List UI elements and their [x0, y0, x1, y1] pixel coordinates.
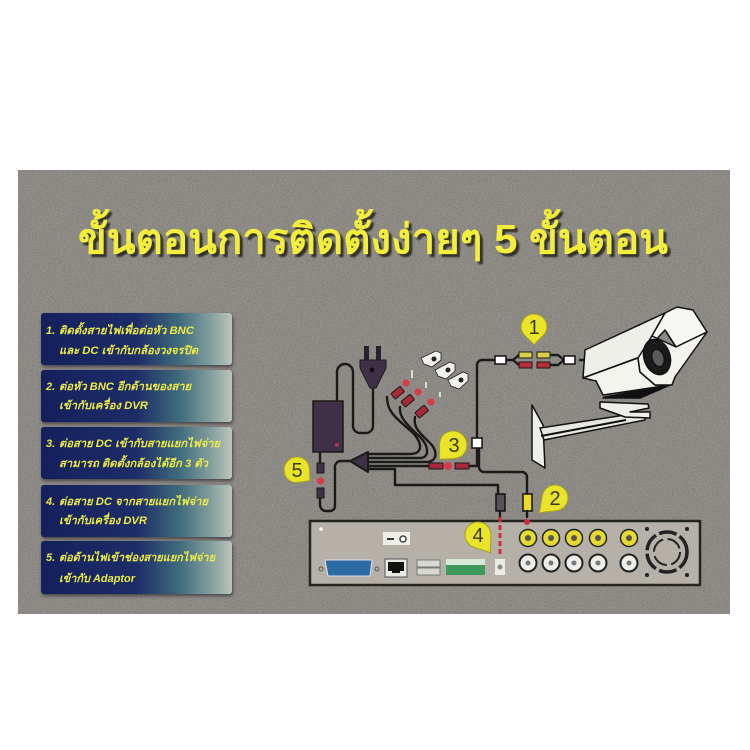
pin 3 [429, 425, 473, 469]
step 3 [41, 427, 233, 481]
step 4: 4. [45, 496, 55, 508]
DC jack [495, 559, 505, 575]
inline red connectors [429, 462, 469, 470]
VGA port [319, 560, 379, 576]
title: ขั้นตอนการติดตั้งง่ายๆ 5 ขั้นตอน [81, 212, 671, 265]
step 3: ต่อสาย DC เข้ากับสายแยกไฟจ่าย [59, 436, 222, 450]
step 2 [41, 370, 233, 424]
connectors at step 5 [317, 463, 324, 498]
step 3: 3. [46, 438, 55, 450]
red dashed connection guides [500, 517, 530, 555]
pin 4: 4 [472, 525, 484, 547]
title: ขั้นตอนการติดตั้งง่ายๆ 5 ขั้นตอน [78, 209, 668, 262]
small camera 1 [421, 351, 441, 367]
yellow BNC row [520, 530, 638, 546]
pin 5: 5 [291, 460, 303, 482]
small camera 2 [435, 362, 455, 379]
panel: steps list [41, 313, 233, 596]
pin 2: 2 [549, 488, 561, 510]
step 5 [41, 541, 233, 596]
inline connector pairs at step 1 [519, 352, 550, 368]
power adaptor [313, 401, 343, 452]
step 1: และ DC เข้ากับกล้องวงจรปิด [59, 344, 199, 357]
USB ports [417, 560, 440, 575]
green terminal [446, 559, 485, 575]
small camera 3 [448, 372, 468, 389]
red connector 1 [391, 380, 410, 399]
step 1: 1. [46, 325, 55, 337]
DVR plugs [496, 494, 532, 517]
pin 1: 1 [528, 317, 540, 339]
wiring diagram cables [320, 355, 590, 511]
step 5: เข้ากับ Adaptor [59, 572, 136, 585]
network port [385, 559, 407, 577]
small cameras with red connectors [391, 351, 468, 418]
power plug [360, 346, 386, 388]
cable splitter [350, 452, 368, 472]
step 1: ติดตั้งสายไฟเพื่อต่อหัว BNC [59, 322, 195, 337]
step 5: ต่อด้านไฟเข้าช่องสายแยกไฟจ่าย [59, 550, 217, 564]
DVR rear panel [310, 521, 700, 585]
camera body [583, 307, 707, 398]
security camera [532, 307, 707, 468]
camera bracket [532, 402, 650, 468]
step 2: เข้ากับเครื่อง DVR [59, 397, 148, 412]
step 4 [41, 485, 233, 539]
red connector 2 [401, 388, 422, 407]
cooling fan [645, 527, 689, 577]
power switch [383, 532, 410, 545]
pin 5 [279, 452, 318, 491]
pin 1 [521, 314, 547, 345]
step 4: เข้ากับเครื่อง DVR [59, 512, 147, 527]
camera lens [639, 336, 675, 378]
pin 4 [460, 517, 501, 560]
step 2: ต่อหัว BNC อีกด้านของสาย [59, 380, 193, 393]
step 3: สามารถ ติดตั้งกล้องได้อีก 3 ตัว [59, 455, 209, 470]
pin 3: 3 [448, 435, 460, 457]
junction boxes [472, 356, 575, 448]
pin 2 [530, 480, 573, 523]
background panel [18, 170, 730, 614]
step 1 [41, 313, 233, 367]
red connector 3 [415, 398, 434, 418]
step 2: 2. [45, 381, 55, 393]
step 5: 5. [46, 552, 55, 564]
step 4: ต่อสาย DC จากสายแยกไฟจ่าย [59, 494, 210, 508]
white BNC row [520, 554, 638, 572]
